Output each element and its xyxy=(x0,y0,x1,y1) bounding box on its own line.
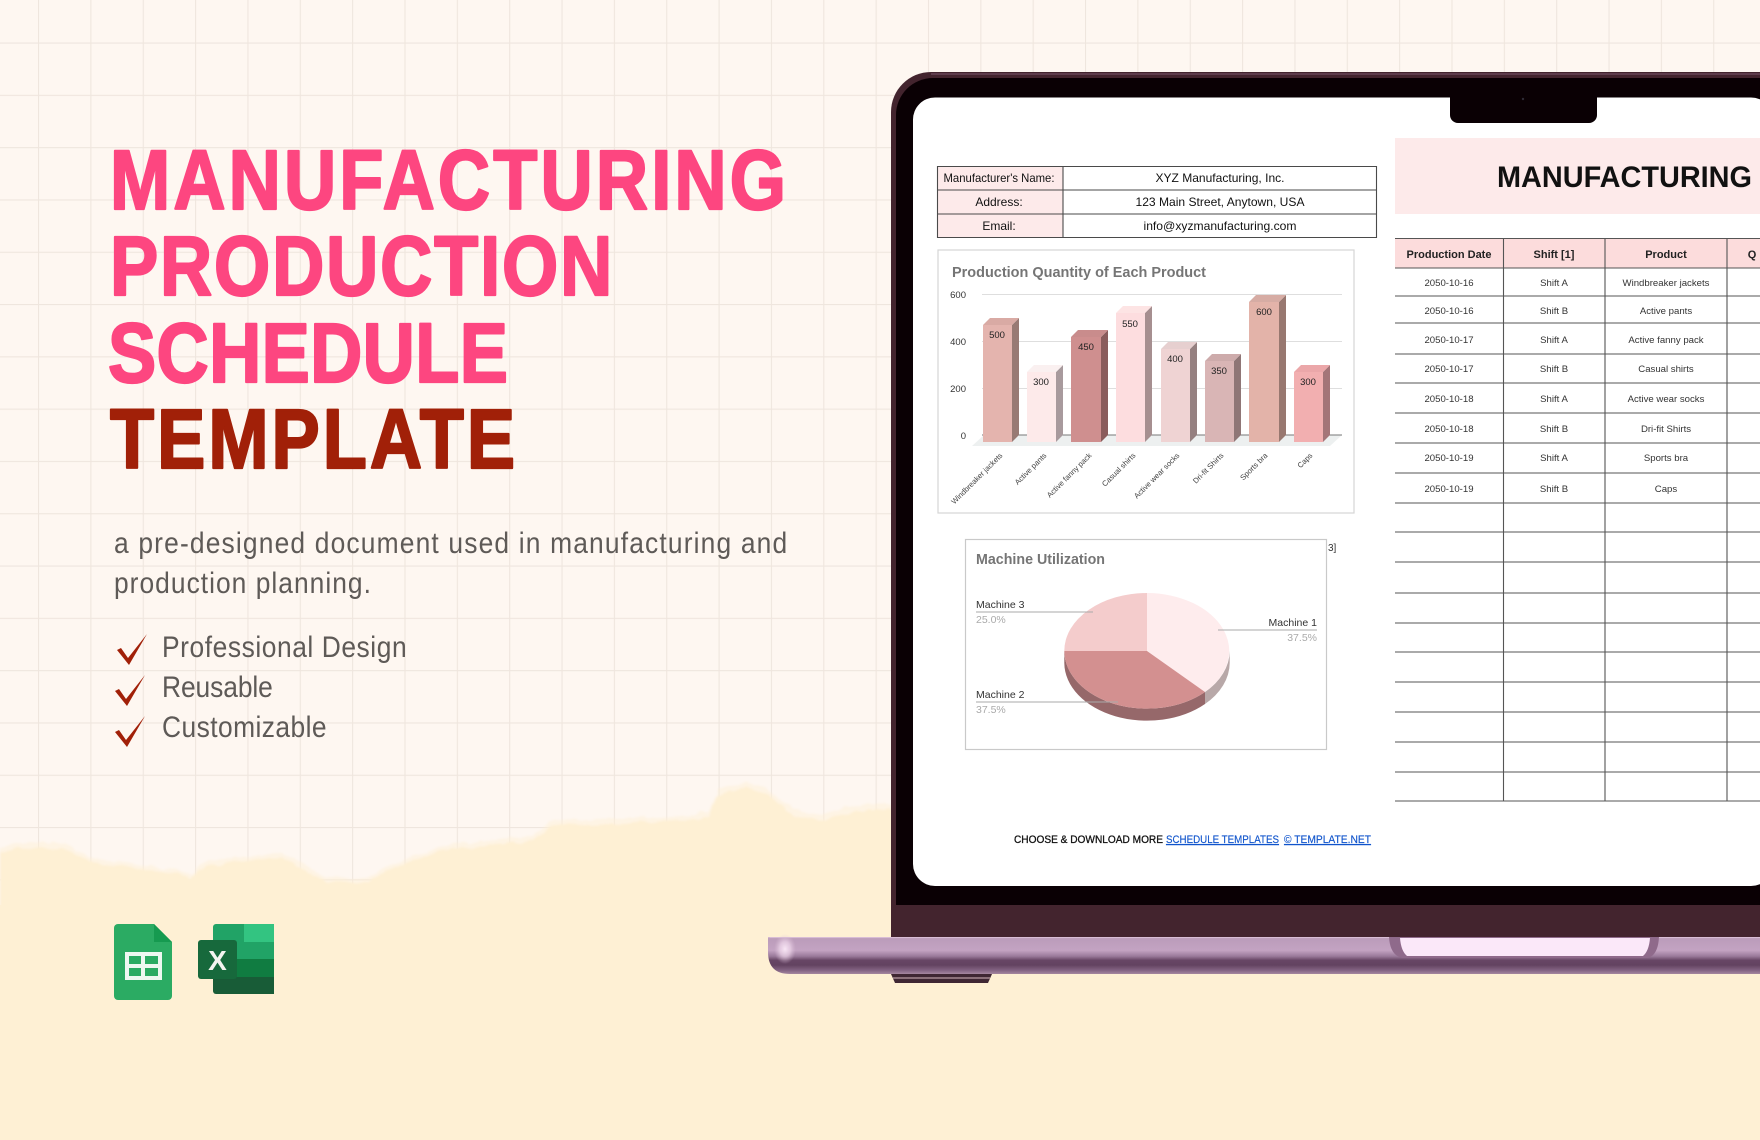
pie label: Machine 1: Machine 1 xyxy=(1269,617,1317,629)
table rows: 2050-10-17 xyxy=(1424,335,1474,346)
camera notch xyxy=(1450,97,1597,123)
category labels: Active pants xyxy=(1013,451,1049,487)
table rows: Shift B xyxy=(1540,306,1568,317)
bar values: 300 xyxy=(1033,377,1049,388)
table rows: 2050-10-18 xyxy=(1424,424,1474,435)
table rows: Shift B xyxy=(1540,484,1568,495)
torn paper band xyxy=(0,782,1760,1140)
bar values: 400 xyxy=(1167,354,1183,365)
title xyxy=(108,133,786,486)
table rows: 2050-10-16 xyxy=(1424,278,1474,289)
pie chart xyxy=(966,540,1337,750)
table header: Q xyxy=(1748,249,1757,261)
table rows: Shift A xyxy=(1540,394,1568,405)
bar values: 350 xyxy=(1211,366,1227,377)
table rows: Active wear socks xyxy=(1628,394,1705,405)
check item: Customizable: Customizable xyxy=(162,709,327,743)
laptop screen xyxy=(913,98,1760,886)
bar values: 300 xyxy=(1300,377,1316,388)
check item: Reusable: Reusable xyxy=(162,669,273,703)
bar values: 450 xyxy=(1078,342,1094,353)
bar values: 500 xyxy=(989,330,1005,341)
title: PRODUCTION xyxy=(110,219,612,313)
category labels: Active wear socks xyxy=(1132,451,1182,500)
axis labels: 400 xyxy=(950,337,966,348)
footer link line: © TEMPLATE.NET xyxy=(1284,834,1371,846)
table rows: Dri-fit Shirts xyxy=(1641,424,1691,435)
table rows: 2050-10-16 xyxy=(1424,306,1474,317)
axis labels: 600 xyxy=(950,290,966,301)
bar values: 600 xyxy=(1256,307,1272,318)
table rows: 2050-10-18 xyxy=(1424,394,1474,405)
pie label: Machine 2: Machine 2 xyxy=(976,689,1025,701)
title: TEMPLATE xyxy=(110,392,515,486)
category labels: Casual shirts xyxy=(1100,451,1138,488)
table rows: Active pants xyxy=(1640,306,1692,317)
pie label: Machine 3 xyxy=(976,599,1093,626)
info table: XYZ Manufacturing, Inc. xyxy=(1156,171,1284,185)
pie label: Machine 1: 37.5% xyxy=(1287,632,1317,644)
category labels: Dri-fit Shirts xyxy=(1191,451,1226,485)
check item: Reusable xyxy=(115,669,273,706)
axis labels xyxy=(950,290,966,442)
category labels: Sports bra xyxy=(1238,451,1270,482)
pie label: Machine 2: 37.5% xyxy=(976,704,1006,716)
table rows: Shift A xyxy=(1540,335,1568,346)
table header: Production Date xyxy=(1407,249,1491,261)
info table: 123 Main Street, Anytown, USA xyxy=(1136,195,1304,209)
pie chart title: Machine Utilization xyxy=(976,552,1105,568)
pie label: Machine 3: Machine 3 xyxy=(976,599,1025,611)
table rows: 2050-10-19 xyxy=(1424,484,1474,495)
table header xyxy=(1407,249,1757,261)
table rows: Shift A xyxy=(1540,278,1568,289)
table rows: Shift B xyxy=(1540,424,1568,435)
table header: Product xyxy=(1645,249,1687,261)
icon: Microsoft Excel xyxy=(198,924,274,994)
laptop base xyxy=(768,934,1760,983)
category labels xyxy=(949,451,1315,506)
table header: Shift [1] xyxy=(1534,249,1575,261)
laptop xyxy=(768,72,1760,983)
table rows: 2050-10-17 xyxy=(1424,364,1474,375)
axis labels: 200 xyxy=(950,384,966,395)
pie slices xyxy=(1064,593,1230,721)
table rows: Shift B xyxy=(1540,364,1568,375)
description text xyxy=(114,525,787,599)
footer link line xyxy=(1014,834,1371,846)
bar values: 550 xyxy=(1122,319,1138,330)
category labels: Windbreaker jackets xyxy=(949,451,1005,506)
footer link line: SCHEDULE TEMPLATES xyxy=(1166,834,1279,846)
icon: Google Sheets xyxy=(114,924,172,1000)
info table: Manufacturer's Name: xyxy=(944,171,1054,185)
schedule table xyxy=(1395,238,1760,801)
bar chart title: Production Quantity of Each Product xyxy=(952,264,1206,281)
table rows: Sports bra xyxy=(1644,453,1689,464)
document title banner: MANUFACTURING xyxy=(1497,161,1752,194)
info table: Email: xyxy=(982,219,1016,233)
stray cell text: 3] xyxy=(1328,543,1337,554)
category labels: Caps xyxy=(1296,451,1315,470)
bars xyxy=(983,295,1330,442)
table rows: 2050-10-19 xyxy=(1424,453,1474,464)
feature list xyxy=(115,629,407,747)
axis labels: 0 xyxy=(961,431,966,442)
table rows: Casual shirts xyxy=(1638,364,1694,375)
table rows: Active fanny pack xyxy=(1628,335,1704,346)
title: MANUFACTURING xyxy=(110,133,786,227)
category labels: Active fanny pack xyxy=(1045,451,1094,499)
bar chart xyxy=(938,250,1354,513)
table rows: Windbreaker jackets xyxy=(1623,278,1710,289)
laptop lid xyxy=(891,72,1760,937)
pie label: Machine 2 xyxy=(976,689,1118,716)
info table: info@xyzmanufacturing.com xyxy=(1144,219,1297,233)
description text: a pre-designed document used in manufacturing and xyxy=(114,525,787,559)
check item: Professional Design: Professional Design xyxy=(162,629,407,663)
title: SCHEDULE xyxy=(108,306,508,400)
description text: production planning. xyxy=(114,565,371,599)
info table: Address: xyxy=(975,195,1023,209)
table rows: Caps xyxy=(1655,484,1677,495)
pie label: Machine 1 xyxy=(1218,617,1317,644)
document title banner xyxy=(1395,138,1760,214)
bar values xyxy=(989,307,1316,388)
pie label: Machine 3: 25.0% xyxy=(976,614,1006,626)
icon: Microsoft Excel: X xyxy=(208,945,227,976)
table rows: Shift A xyxy=(1540,453,1568,464)
footer link line: CHOOSE & DOWNLOAD MORE xyxy=(1014,834,1163,846)
table rows xyxy=(1424,278,1710,495)
info table xyxy=(937,166,1377,238)
